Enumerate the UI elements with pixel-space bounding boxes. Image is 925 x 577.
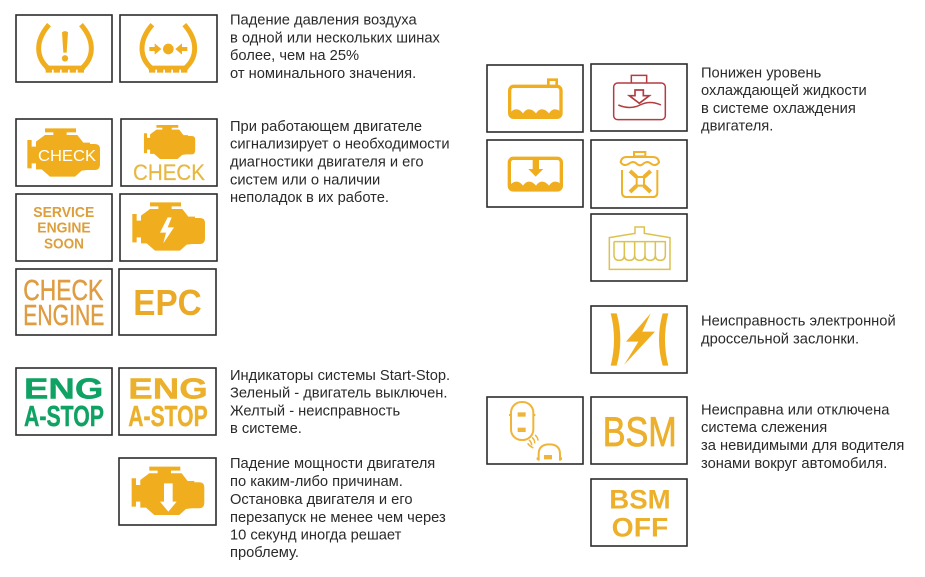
- text: coolant description: в системе охлаждения: [701, 101, 856, 117]
- icon box: EPC: [119, 269, 216, 335]
- text: BSM description: за невидимыми для водителя: [701, 438, 904, 454]
- text: coolant description: двигателя.: [701, 118, 773, 134]
- icon box: CHECK ENGINE: ENGINE: [23, 300, 104, 332]
- text: BSM description: Неисправна или отключена: [701, 402, 890, 418]
- icon box: coolant tank with waves: [487, 65, 583, 132]
- text: start-stop description: Индикаторы системы Start-Stop.: [230, 368, 450, 384]
- text: start-stop description: Желтый - неисправность: [230, 404, 400, 420]
- text: power loss description: Остановка двигателя и его: [230, 492, 413, 508]
- text: check engine description: диагностики двигателя и его: [230, 154, 424, 170]
- text: coolant description: [701, 66, 867, 134]
- text: check engine description: сигнализирует о необходимости: [230, 136, 450, 152]
- text: power loss description: перезапуск не менее чем через: [230, 510, 446, 526]
- icon box: CHECK ENGINE: [16, 269, 112, 335]
- text: start-stop description: Зеленый - двигатель выключен.: [230, 386, 447, 402]
- text: tire pressure description: в одной или нескольких шинах: [230, 30, 441, 46]
- text: check engine description: систем или о наличии: [230, 172, 380, 188]
- text: tire pressure description: Падение давления воздуха: [230, 12, 417, 28]
- icon box: BSM: BSM: [603, 408, 677, 455]
- icon box: SERVICE ENGINE SOON: SERVICE: [33, 204, 94, 221]
- icon box: yellow ENG A-STOP: A-STOP: [128, 401, 208, 433]
- text: check engine description: неполадок в их работе.: [230, 190, 389, 206]
- icon box: engine CHECK inside: [16, 119, 112, 186]
- text: BSM description: система слежения: [701, 420, 827, 436]
- icon box: yellow ENG A-STOP: ENG: [128, 373, 208, 405]
- icon box: EPC: EPC: [133, 282, 202, 323]
- text: power loss description: [230, 456, 446, 561]
- icon box: green ENG A-STOP: [16, 368, 112, 435]
- text: coolant description: охлаждающей жидкости: [701, 83, 867, 99]
- icon box: engine with CHECK below: [121, 119, 217, 186]
- icon box: SERVICE ENGINE SOON: ENGINE: [37, 220, 91, 236]
- text: BSM description: [701, 402, 904, 472]
- text: start-stop description: [230, 368, 450, 437]
- icon box: green ENG A-STOP: ENG: [24, 373, 103, 405]
- icon box: electronic throttle: [591, 306, 687, 373]
- text: power loss description: 10 секунд иногда решает: [230, 528, 402, 544]
- icon box: BSM OFF: BSM: [609, 484, 671, 514]
- text: BSM description: зонами вокруг автомобиля.: [701, 456, 887, 472]
- icon box: tire pressure warning: [16, 15, 112, 82]
- icon box: coolant fan tank: [591, 140, 687, 208]
- icon box: engine with CHECK below: CHECK: [133, 160, 205, 185]
- icon box: BSM OFF: OFF: [612, 513, 668, 543]
- text: power loss description: Падение мощности двигателя: [230, 456, 435, 472]
- icon box: green ENG A-STOP: A-STOP: [24, 401, 104, 433]
- icon box: tire pressure arrows: [120, 15, 217, 82]
- text: check engine description: При работающем двигателе: [230, 119, 422, 135]
- icon box: blind spot cars: [487, 397, 583, 464]
- text: check engine description: [230, 119, 450, 206]
- icon box: SERVICE ENGINE SOON: SOON: [44, 236, 84, 252]
- icon box: red coolant tank outline: [591, 64, 687, 131]
- icon box: tank with down arrow: [487, 140, 583, 207]
- icon box: radiator outline: [591, 214, 687, 281]
- icon box: SERVICE ENGINE SOON: [16, 194, 112, 261]
- text: power loss description: проблему.: [230, 545, 299, 561]
- text: throttle description: дроссельной заслонки.: [701, 332, 859, 348]
- text: tire pressure description: [230, 12, 441, 82]
- icon box: BSM OFF: [591, 479, 687, 546]
- text: tire pressure description: более, чем на 25%: [230, 48, 359, 64]
- text: start-stop description: в системе.: [230, 421, 302, 437]
- text: tire pressure description: от номинального значения.: [230, 66, 416, 82]
- icon box: yellow ENG A-STOP: [119, 368, 216, 435]
- text: coolant description: Понижен уровень: [701, 66, 822, 82]
- icon box: CHECK ENGINE: CHECK: [23, 275, 104, 307]
- icon box: engine with down arrow: [119, 458, 216, 525]
- text: throttle description: [701, 314, 896, 348]
- text: throttle description: Неисправность электронной: [701, 314, 896, 330]
- icon box: engine CHECK inside: CHECK: [38, 148, 97, 165]
- icon box: engine with lightning bolt: [120, 194, 217, 261]
- icon box: BSM: [591, 397, 687, 464]
- text: power loss description: по каким-либо причинам.: [230, 474, 403, 490]
